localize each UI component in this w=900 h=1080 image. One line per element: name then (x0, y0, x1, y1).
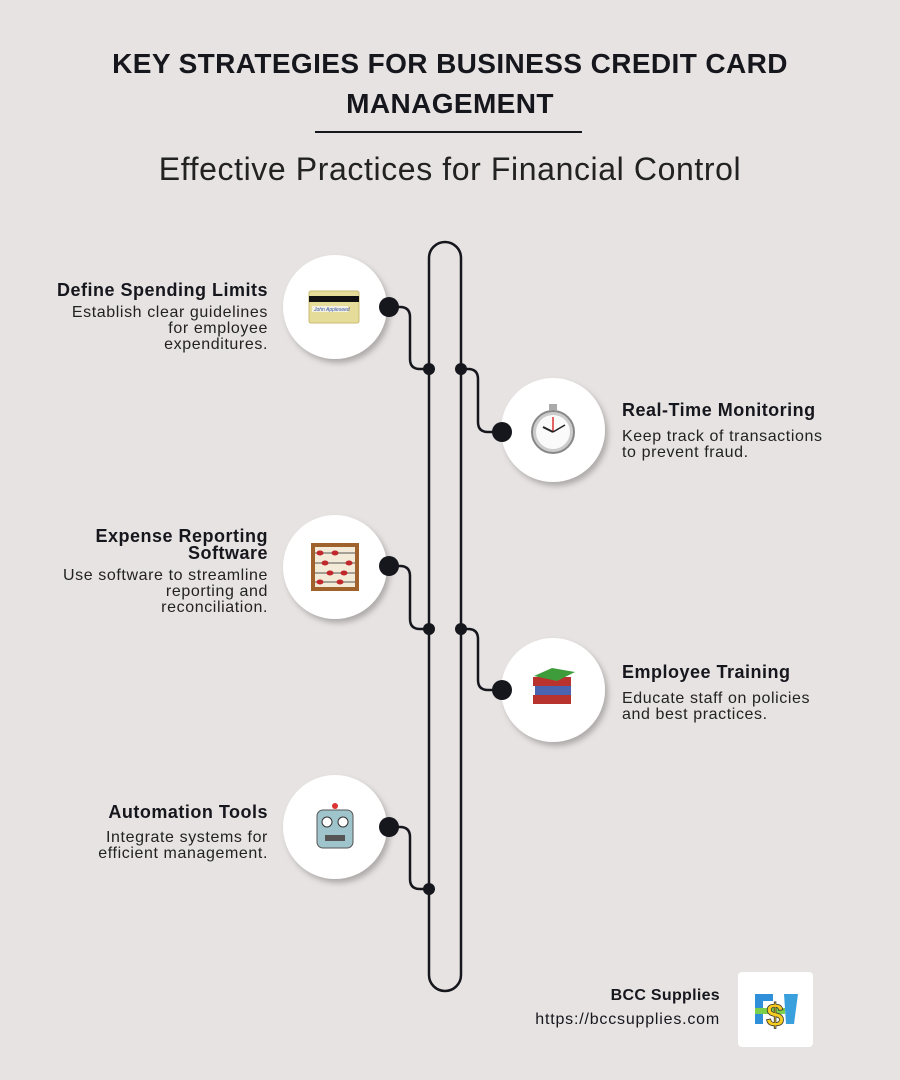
step 5 text: Automation Tools (108, 802, 268, 822)
step 3 text: Use software to streamline (63, 567, 268, 584)
step 2 text: Keep track of transactions (622, 428, 823, 445)
icon: books (533, 668, 575, 704)
title underline (315, 131, 582, 133)
step 3 text: reconciliation. (161, 599, 268, 616)
step 4 text: Educate staff on policies (622, 690, 810, 707)
icon: stopwatch (532, 404, 574, 453)
step 4 text (622, 662, 810, 723)
step 1 text (57, 280, 268, 353)
footer brand (535, 987, 720, 1028)
logo: $ (766, 997, 784, 1033)
step 5 text: Integrate systems for (106, 829, 268, 846)
icon: abacus (311, 543, 359, 591)
step 5 text: efficient management. (98, 845, 268, 862)
footer brand: BCC Supplies (611, 987, 720, 1004)
step 3 text: Expense Reporting (95, 526, 268, 546)
step 3 text (63, 526, 268, 616)
step 1 text: for employee (168, 320, 268, 337)
step 4 text: Employee Training (622, 662, 791, 682)
step 3 text: Software (188, 543, 268, 563)
step 1 text: Define Spending Limits (57, 280, 268, 300)
icon circles (283, 255, 605, 879)
connector dots (379, 297, 512, 837)
step 2 text (622, 400, 823, 461)
footer brand: https://bccsupplies.com (535, 1011, 720, 1028)
step 1 text: expenditures. (164, 336, 268, 353)
icon: robot (317, 803, 353, 848)
title (112, 48, 788, 119)
step 2 text: Real-Time Monitoring (622, 400, 816, 420)
subtitle: Effective Practices for Financial Control (159, 151, 741, 187)
title: MANAGEMENT (346, 88, 554, 119)
junction dots (423, 363, 467, 895)
step 1 text: Establish clear guidelines (72, 304, 268, 321)
step 5 text (98, 802, 268, 862)
icon: credit card: John Appleseed (313, 307, 350, 313)
step 2 text: to prevent fraud. (622, 444, 749, 461)
icon: credit card (309, 291, 359, 323)
title: KEY STRATEGIES FOR BUSINESS CREDIT CARD (112, 48, 788, 79)
step 4 text: and best practices. (622, 706, 768, 723)
step 3 text: reporting and (166, 583, 268, 600)
logo (738, 972, 813, 1047)
